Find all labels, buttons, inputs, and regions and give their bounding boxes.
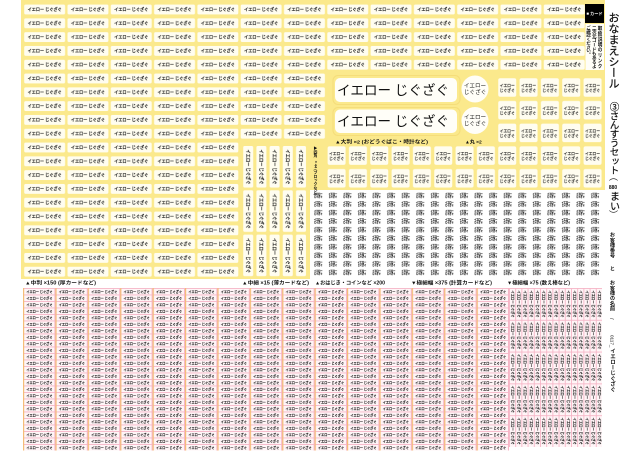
panel: round labels: イエロー <box>464 82 487 90</box>
panel: large labels <box>333 76 460 136</box>
panel: instruction note: 取扱説明のリンク <box>597 26 603 70</box>
panel: black card tag: ■ カード <box>586 10 603 17</box>
customer info line: お客様の名前 <box>609 279 615 313</box>
customer info line: と <box>609 266 615 272</box>
yellow sheet background <box>21 0 605 279</box>
caption: extra thin labels: ▼極細幅 ×75 (数え棒など) <box>507 280 570 286</box>
panel: round labels: じぐざぐ <box>464 120 486 128</box>
caption: round labels: ▲丸 ×2 <box>465 138 482 146</box>
customer info line: イエローじぐざぐ <box>609 348 616 392</box>
panel: instruction note: 二次元コードもあるよ <box>592 26 597 69</box>
caption: medium labels 2: ▲中細 ×15 (薄カードなど) <box>242 280 309 286</box>
panel: round labels <box>462 76 488 134</box>
subtitle: （ <box>608 172 618 182</box>
panel: vertical labels <box>242 145 308 278</box>
customer info line: お客様番号 <box>609 231 615 259</box>
caption: thin labels: ▼極細幅 ×375 (計算カードなど) <box>411 280 492 286</box>
subtitle: ③さんすうセット <box>608 102 619 175</box>
title: おなまえシール <box>607 12 620 89</box>
panel: instruction note <box>586 24 604 70</box>
panel: horizontal labels, middle block <box>240 3 326 141</box>
caption: square labels: ▶四角 ×44 (ブロックなど) <box>313 145 318 196</box>
panel: black card tag <box>585 4 604 23</box>
caption: medium labels: ▲中判 ×150 (厚カードなど) <box>25 280 96 286</box>
panel: horizontal labels, left block <box>23 3 240 279</box>
customer info line: / <box>608 318 614 320</box>
subtitle: 880 <box>609 185 617 191</box>
subtitle: ） <box>608 210 618 219</box>
panel: instruction note: ご確認ください。 <box>586 25 592 56</box>
subtitle <box>608 102 619 219</box>
panel: large labels: イエロー じぐざぐ <box>337 113 449 129</box>
panel: thin labels grid <box>23 288 509 450</box>
panel: large labels: イエロー じぐざぐ <box>337 82 449 98</box>
panel: square labels, upper right <box>497 77 603 145</box>
panel: extra thin vertical labels <box>509 288 602 447</box>
caption: coin labels: ▲おはじき・コインなど ×200 <box>315 280 385 286</box>
customer info line <box>608 231 616 392</box>
panel: round labels: じぐざぐ <box>464 88 486 96</box>
subtitle: まい <box>608 191 618 211</box>
caption: large labels: ▲大判 ×2 (おどうぐばこ・時計など) <box>335 138 428 146</box>
panel: mini labels <box>311 191 602 276</box>
panel: horizontal labels, top right block <box>326 3 586 72</box>
customer info line: 0117_ <box>610 335 614 348</box>
panel: square labels, lower rows <box>326 145 603 190</box>
panel: round labels: イエロー <box>464 114 487 121</box>
